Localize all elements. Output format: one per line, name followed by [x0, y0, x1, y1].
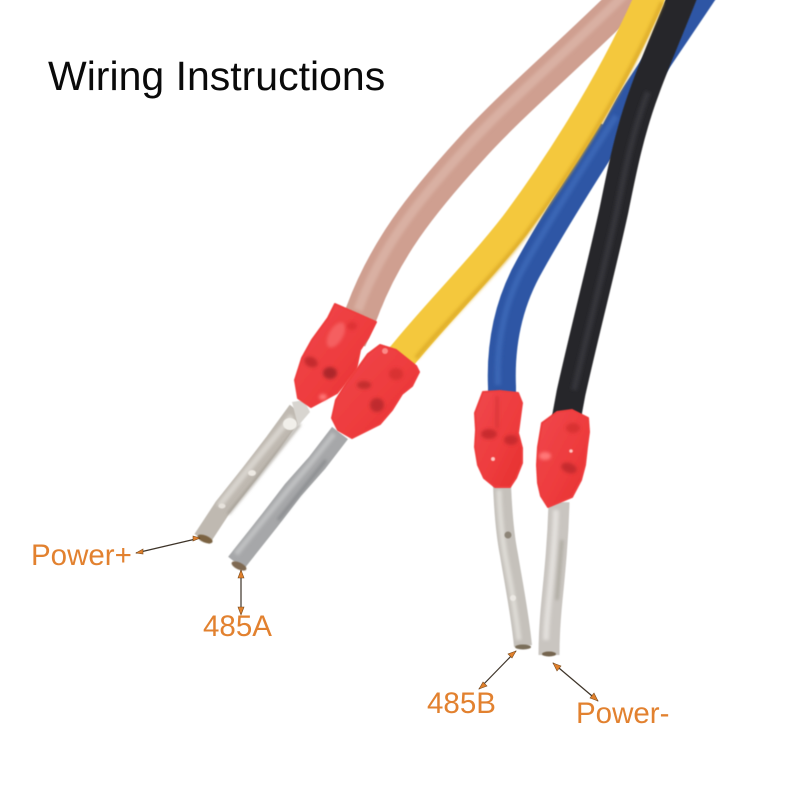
arrow: 485B	[479, 651, 516, 689]
ferrule: Power+	[295, 304, 376, 407]
wire: black	[566, 0, 684, 420]
label: Power+: Power+	[31, 539, 132, 572]
tip: 485B	[499, 484, 531, 650]
ferrule: 485B	[475, 391, 522, 487]
tip: 485A	[230, 433, 340, 573]
label: 485B: 485B	[427, 687, 496, 720]
arrow: 485A	[238, 570, 244, 615]
tip: Power-	[542, 502, 562, 656]
label: 485A: 485A	[203, 610, 272, 643]
wire: blue	[498, 0, 705, 410]
cream strip between yellow and black wires	[600, 33, 647, 123]
ferrule: 485A	[332, 345, 419, 438]
ferrule: Power-	[537, 410, 589, 507]
tip: Power+	[196, 400, 310, 545]
arrow: Power-	[553, 663, 598, 701]
wire: brown	[350, 0, 632, 340]
wire: yellow	[392, 0, 662, 368]
label: Power-: Power-	[576, 697, 669, 730]
arrow: Power+	[136, 536, 200, 554]
title: Wiring Instructions	[48, 53, 385, 99]
